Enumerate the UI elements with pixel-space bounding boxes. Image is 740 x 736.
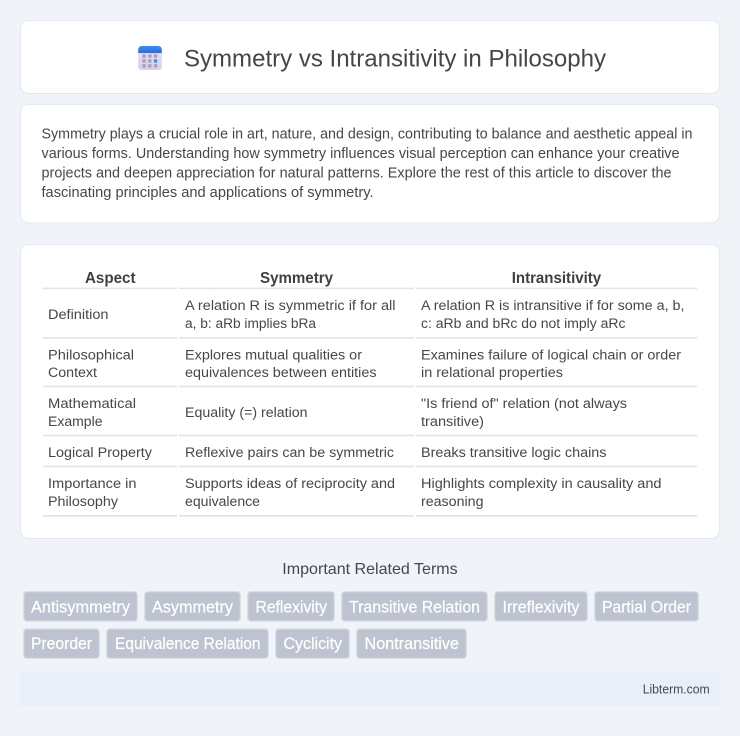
tag: Asymmetry	[145, 592, 240, 621]
table row: definition	[48, 298, 684, 332]
panel: introduction	[20, 104, 720, 223]
tag: Partial Order: Partial Order	[602, 598, 692, 616]
table row: logical property: Breaks transitive logic chains	[421, 445, 606, 461]
table row: philosophical context: equivalences between entities	[185, 365, 376, 381]
table row: philosophical context: Philosophical	[48, 347, 134, 363]
table row: importance in philosophy: reasoning	[421, 494, 484, 510]
table row: importance in philosophy: Philosophy	[48, 494, 119, 510]
tag: Asymmetry: Asymmetry	[152, 598, 234, 616]
table row: mathematical example: Mathematical	[48, 396, 136, 412]
table row: importance in philosophy: Highlights complexity in causality and	[421, 476, 662, 492]
header panel	[20, 20, 720, 94]
tag: Irreflexivity: Irreflexivity	[502, 598, 580, 616]
footer source: Libterm.com	[643, 682, 710, 696]
table row: logical property: Logical Property	[48, 445, 153, 461]
table row: definition: Definition	[48, 307, 108, 323]
table row: mathematical example: Equality (=) relation	[185, 405, 308, 421]
table row: definition: A relation R is intransitive if for some a, b,	[421, 298, 684, 314]
tag: Equivalence Relation	[107, 629, 268, 658]
table row: logical property	[48, 445, 606, 461]
tag: Reflexivity	[248, 592, 334, 621]
tag: Irreflexivity	[495, 592, 587, 621]
tag: Antisymmetry: Antisymmetry	[31, 598, 131, 616]
title: Symmetry vs Intransitivity in Philosophy	[184, 46, 607, 73]
table row: philosophical context: Examines failure of logical chain or order	[421, 347, 681, 363]
table column headings: Aspect	[85, 270, 136, 287]
table row: mathematical example: "Is friend of" relation (not always	[421, 396, 627, 412]
table row: philosophical context: in relational properties	[421, 365, 563, 381]
tag: Transitive Relation	[342, 592, 487, 621]
intro text: fascinating principles and applications of symmetry.	[42, 185, 374, 201]
table row: importance in philosophy: equivalence	[185, 494, 260, 510]
table row: philosophical context: Explores mutual qualities or	[185, 347, 362, 363]
footer	[20, 672, 720, 706]
panel: comparison table	[20, 244, 720, 538]
table row: importance in philosophy	[48, 476, 662, 510]
tag: Nontransitive	[357, 629, 466, 658]
tag: Transitive Relation: Transitive Relation	[349, 598, 480, 616]
tag: Preorder	[24, 629, 99, 658]
tag: Reflexivity: Reflexivity	[256, 598, 328, 616]
table column headings: Symmetry	[260, 270, 333, 287]
related term tags	[24, 592, 698, 658]
tag: Partial Order	[595, 592, 698, 621]
tag: Antisymmetry	[24, 592, 137, 621]
table column headings	[85, 270, 601, 287]
table row: definition: c: aRb and bRc do not imply aRc	[421, 316, 626, 332]
tag: Cyclicity	[276, 629, 349, 658]
table row: mathematical example: transitive)	[421, 414, 484, 430]
intro text: projects and deepen appreciation for natural patterns. Explore the rest of this article to discover the	[42, 166, 672, 182]
intro text: various forms. Understanding how symmetry influences visual perception can enhance your creative	[42, 146, 680, 162]
table row: importance in philosophy: Importance in	[48, 476, 136, 492]
table row: logical property: Reflexive pairs can be symmetric	[185, 445, 394, 461]
table row: philosophical context	[48, 347, 681, 381]
tag: Preorder: Preorder	[31, 635, 93, 653]
table row: mathematical example	[48, 396, 627, 430]
related terms heading: Important Related Terms	[282, 561, 458, 578]
table column headings: Intransitivity	[512, 270, 601, 287]
table row: philosophical context: Context	[48, 365, 97, 381]
tag: Equivalence Relation: Equivalence Relation	[115, 635, 260, 653]
table row: definition: a, b: aRb implies bRa	[185, 316, 316, 332]
table row: definition: A relation R is symmetric if for all	[185, 298, 396, 314]
intro text	[42, 127, 692, 201]
icon: calendar	[138, 46, 162, 70]
tag: Cyclicity: Cyclicity	[284, 635, 343, 653]
table row: importance in philosophy: Supports ideas of reciprocity and	[185, 476, 395, 492]
tag: Nontransitive: Nontransitive	[364, 635, 459, 653]
table row: mathematical example: Example	[48, 414, 103, 430]
intro text: Symmetry plays a crucial role in art, nature, and design, contributing to balance and aesthetic appeal in	[42, 127, 692, 143]
